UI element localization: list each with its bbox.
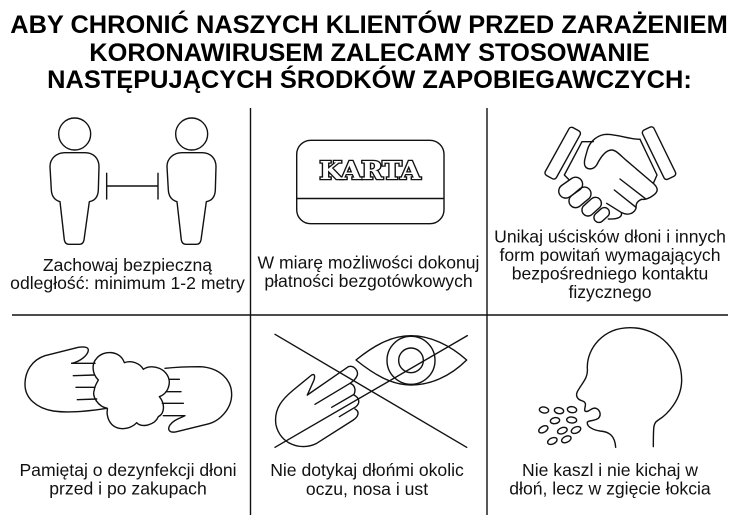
caption: form powitań wymagających [500,245,720,265]
caption: W miarę możliwości dokonuj [258,252,479,272]
caption: bezpośredniego kontaktu [512,264,708,284]
icon: payment card: KARTA [320,156,421,185]
icon: two people with distance marker [50,118,216,244]
title: ABY CHRONIĆ NASZYCH KLIENTÓW PRZED ZARAŻENIEM [10,9,728,39]
icon: crossed eye and hand [275,334,467,447]
panel: safe distance [10,118,245,293]
icon: head with droplets [538,328,682,447]
title: KORONAWIRUSEM ZALECAMY STOSOWANIE [89,39,650,67]
icon: payment card [297,140,444,224]
caption: Zachowaj bezpieczną [43,255,212,275]
caption: Pamiętaj o dezynfekcji dłoni [19,460,237,480]
icon: hands with foam [25,347,232,432]
caption [509,460,711,498]
title [10,9,728,94]
panel: do not touch face [270,334,467,499]
caption: przed i po zakupach [49,478,207,498]
caption [10,255,245,293]
caption: oczu, nosa i ust [306,479,428,499]
caption: odległość: minimum 1-2 metry [10,273,245,293]
caption [494,226,726,302]
panel: avoid handshakes [494,126,726,302]
panel: hand disinfection [19,347,237,498]
caption [270,460,464,499]
caption [258,252,479,291]
panel: cashless payment [258,140,479,291]
caption: dłoń, lecz w zgięcie łokcia [509,478,711,498]
panel: cough into elbow [509,328,711,498]
caption: Nie dotykaj dłońmi okolic [270,460,464,480]
title: NASTĘPUJĄCYCH ŚRODKÓW ZAPOBIEGAWCZYCH: [47,64,692,94]
caption: Nie kaszl i nie kichaj w [522,460,698,480]
caption: Unikaj uścisków dłoni i innych [494,226,726,246]
caption [19,460,237,498]
icon: handshake [544,126,677,225]
caption: płatności bezgotówkowych [264,271,473,291]
caption: fizycznego [568,282,652,302]
